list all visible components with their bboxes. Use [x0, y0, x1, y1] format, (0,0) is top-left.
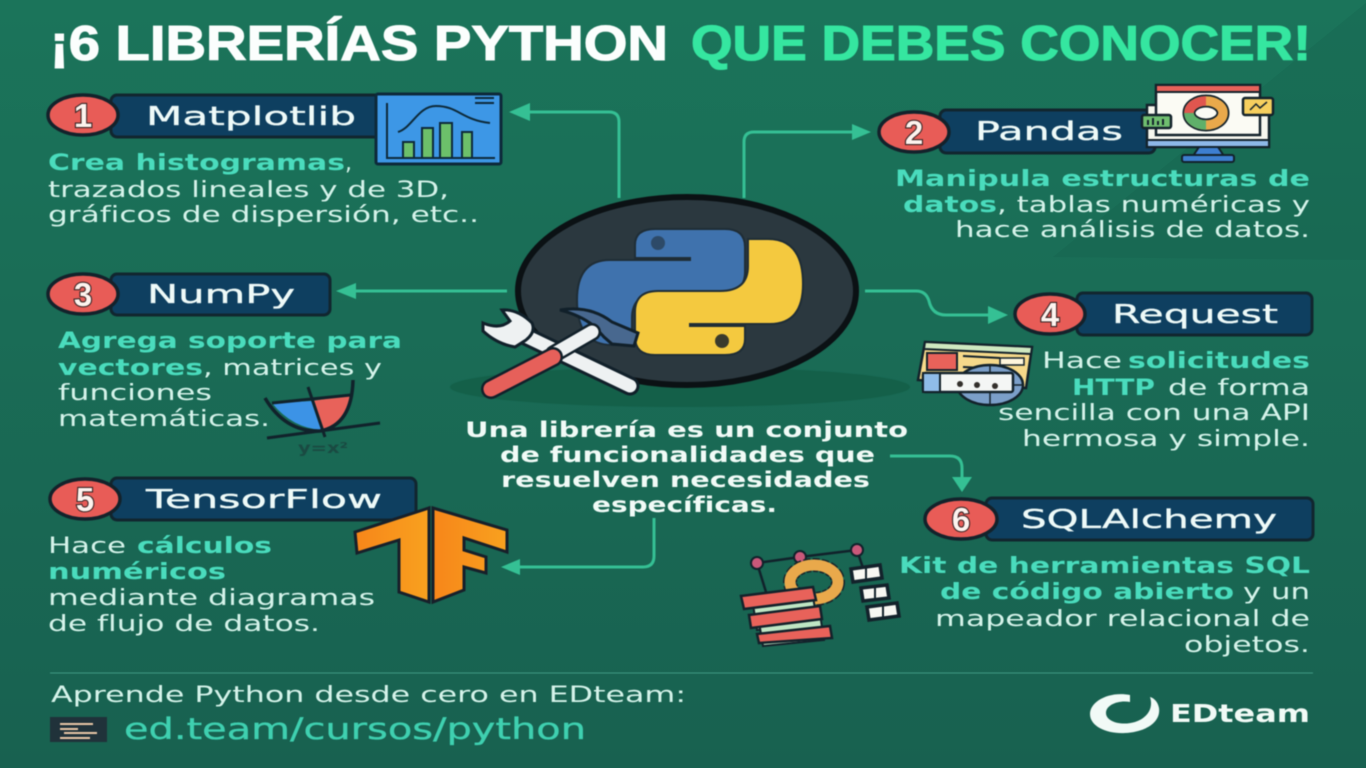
- icon: TensorFlow logo: [355, 508, 507, 602]
- description: TensorFlow: [48, 534, 375, 637]
- number badge 3: 3: [74, 276, 92, 313]
- icon: parabola graph: [265, 380, 380, 457]
- description: Pandas: , tablas numéricas y: [997, 193, 1310, 218]
- panel: TensorFlow: [48, 478, 507, 637]
- number badge 4: 4: [1041, 296, 1060, 333]
- number badge 4: [1015, 294, 1085, 334]
- text block: library definition: [465, 418, 908, 517]
- icon: dashboard monitor: [1142, 85, 1273, 162]
- heading bar: SQLAlchemy: SQLAlchemy: [1021, 505, 1277, 535]
- number badge 6: [925, 499, 997, 539]
- description: Request: hermosa y simple.: [1022, 427, 1310, 452]
- heading bar: Pandas: [940, 110, 1155, 153]
- description: Pandas: [895, 167, 1310, 243]
- icon: browser and globe: [918, 342, 1032, 405]
- panel: Request: [918, 293, 1312, 452]
- heading bar: Matplotlib: Matplotlib: [146, 102, 356, 132]
- heading bar: Pandas: Pandas: [975, 117, 1123, 147]
- description: Matplotlib: [48, 151, 479, 228]
- panel: SQLAlchemy: [741, 498, 1313, 658]
- footer text: learn Python: Aprende Python desde cero en EDteam:: [51, 683, 686, 708]
- description: NumPy: Agrega soporte para: [58, 329, 402, 354]
- description: Request: [998, 349, 1310, 452]
- arrow: definition to SQLAlchemy: [890, 456, 972, 492]
- description: Request: sencilla con una API: [998, 401, 1310, 426]
- description: Request: solicitudes: [1128, 349, 1310, 374]
- description: NumPy: , matrices y: [203, 356, 382, 381]
- heading bar: NumPy: [111, 274, 330, 315]
- icon: python logo: [577, 229, 803, 355]
- number badge 5: 5: [76, 481, 94, 518]
- heading bar: TensorFlow: [111, 478, 416, 520]
- description: Request: HTTP: [1072, 376, 1155, 401]
- title: [50, 17, 1311, 71]
- description: Matplotlib: gráficos de dispersión, etc..: [48, 203, 479, 228]
- description: TensorFlow: mediante diagramas: [48, 586, 375, 611]
- description: Matplotlib: ,: [345, 151, 352, 176]
- description: SQLAlchemy: Kit de herramientas SQL: [899, 554, 1310, 579]
- number badge 3: [48, 274, 118, 314]
- description: Matplotlib: trazados lineales y de 3D,: [48, 178, 449, 203]
- description: SQLAlchemy: de código abierto: [940, 580, 1234, 605]
- icon: wrench and hammer: [483, 309, 638, 389]
- number badge 2: 2: [905, 114, 923, 151]
- description: SQLAlchemy: [899, 554, 1310, 658]
- description: TensorFlow: Hace: [48, 534, 126, 559]
- description: NumPy: funciones: [58, 381, 212, 406]
- text block: library definition: resuelven necesidades: [501, 468, 870, 492]
- icon: database and gear: [741, 544, 899, 646]
- arrow: python to Request: [865, 291, 1008, 324]
- description: Pandas: Manipula estructuras de: [895, 167, 1310, 192]
- arrow: python to Matplotlib: [509, 103, 619, 198]
- description: Pandas: datos: [903, 193, 997, 218]
- description: Request: de forma: [1168, 376, 1310, 401]
- icon: parabola graph: y=x²: [298, 439, 348, 457]
- description: TensorFlow: numéricos: [48, 560, 226, 585]
- logo: EDteam: [1090, 694, 1310, 733]
- dark disc: [518, 197, 856, 385]
- heading bar: Matplotlib: [111, 95, 381, 137]
- central python emblem: [450, 197, 910, 407]
- description: NumPy: matemáticas.: [58, 407, 270, 432]
- description: Pandas: hace análisis de datos.: [955, 218, 1310, 243]
- description: TensorFlow: cálculos: [137, 534, 272, 559]
- description: SQLAlchemy: objetos.: [1184, 633, 1310, 658]
- heading bar: Request: Request: [1112, 300, 1278, 330]
- panel: Pandas: [879, 85, 1310, 243]
- number badge 5: [50, 479, 120, 519]
- description: Request: Hace: [1042, 349, 1122, 374]
- heading bar: SQLAlchemy: [986, 498, 1313, 540]
- icon: histogram chart: [376, 94, 501, 164]
- footer link: ed.team/cursos/python: [124, 712, 586, 746]
- text block: library definition: Una librería es un conjunto: [465, 418, 908, 442]
- arrow: python to Pandas: [744, 124, 871, 198]
- number badge 6: 6: [952, 501, 970, 538]
- heading bar: NumPy: NumPy: [147, 280, 295, 310]
- panel: Matplotlib: [48, 94, 501, 228]
- description: TensorFlow: de flujo de datos.: [48, 612, 320, 637]
- title: QUE DEBES CONOCER!: [691, 17, 1311, 71]
- panel: NumPy: [48, 274, 402, 457]
- heading bar: TensorFlow: TensorFlow: [144, 485, 382, 515]
- title: ¡6 LIBRERÍAS PYTHON: [50, 17, 668, 71]
- number badge 1: [48, 95, 118, 135]
- heading bar: Request: [1077, 293, 1312, 335]
- description: SQLAlchemy: mapeador relacional de: [935, 607, 1310, 632]
- logo: EDteam: EDteam: [1170, 699, 1310, 728]
- description: NumPy: vectores: [58, 356, 203, 381]
- text block: library definition: de funcionalidades que: [500, 443, 875, 467]
- number badge 2: [879, 112, 949, 152]
- description: SQLAlchemy: y un: [1243, 580, 1310, 605]
- shadow: [450, 367, 910, 407]
- footer call to action: [50, 683, 686, 746]
- text block: library definition: específicas.: [592, 493, 777, 517]
- number badge 1: 1: [74, 97, 92, 134]
- description: NumPy: [58, 329, 402, 432]
- description: Matplotlib: Crea histogramas: [48, 151, 345, 176]
- arrow: definition to TensorFlow: [501, 518, 654, 575]
- arrow: python to NumPy: [336, 283, 507, 299]
- icon: code terminal: [50, 717, 107, 742]
